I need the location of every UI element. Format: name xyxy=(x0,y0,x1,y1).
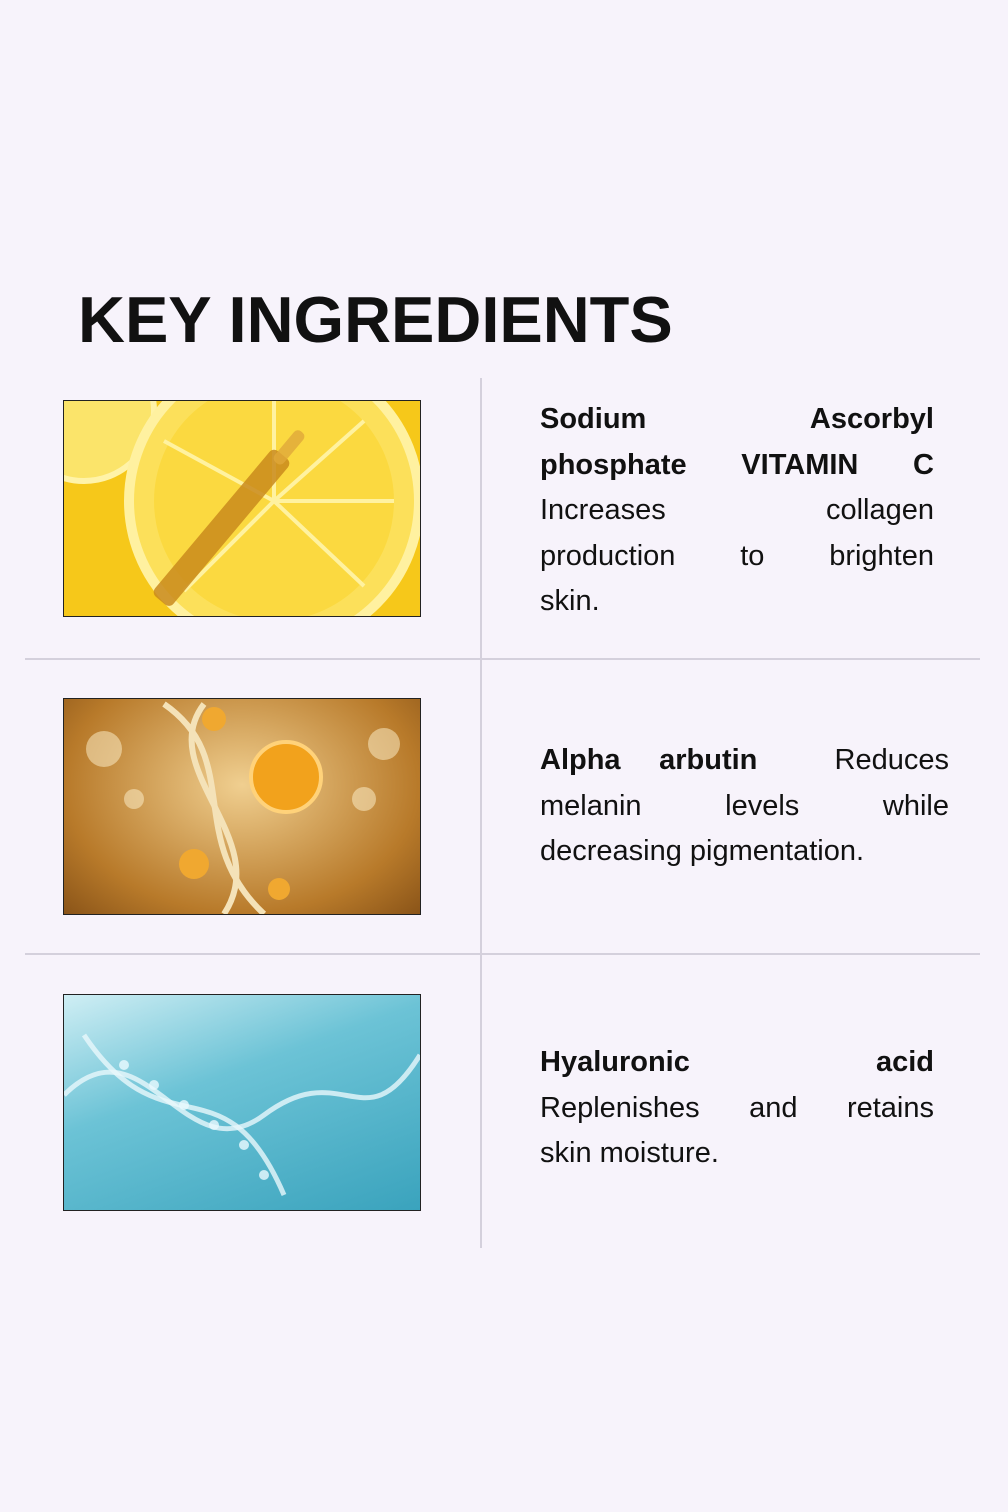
text: alpha arbutin: decreasing pigmentation. xyxy=(540,835,864,867)
text: hyaluronic acid: skin moisture. xyxy=(540,1137,719,1169)
text: vitamin C xyxy=(540,403,934,617)
text: vitamin C: phosphate VITAMIN C xyxy=(540,448,934,480)
image: hyaluronic acid xyxy=(63,994,421,1211)
text: hyaluronic acid xyxy=(540,1046,934,1169)
text: hyaluronic acid: Replenishes and retains xyxy=(540,1092,934,1124)
text: hyaluronic acid: Hyaluronic acid xyxy=(540,1046,934,1078)
text: alpha arbutin xyxy=(540,744,949,867)
text: alpha arbutin: Alpha arbutin Reduces xyxy=(540,744,949,776)
text: vitamin C: Increases collagen xyxy=(540,494,934,526)
image: lemon with ampoule xyxy=(63,400,421,617)
text: vitamin C: skin. xyxy=(540,585,600,617)
title: KEY INGREDIENTS xyxy=(78,283,673,356)
text: vitamin C: production to brighten xyxy=(540,540,934,572)
text: vitamin C: Sodium Ascorbyl xyxy=(540,403,934,435)
image: alpha arbutin xyxy=(63,698,421,915)
text: alpha arbutin: melanin levels while xyxy=(540,790,949,822)
